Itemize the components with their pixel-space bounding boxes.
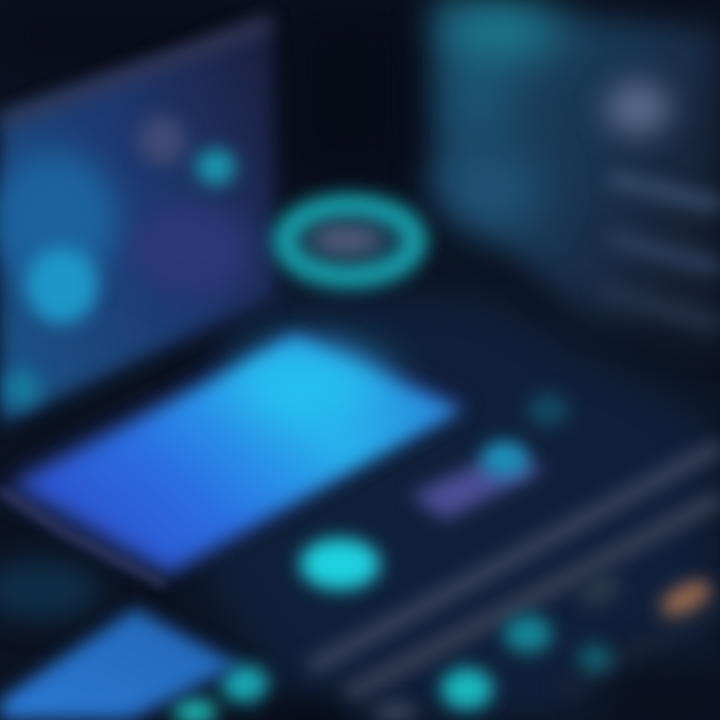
- panel: small purple card and teal dot: [410, 394, 568, 520]
- icon: grey blob and lines on right screen: [606, 82, 670, 134]
- icon: small teal dots: [173, 615, 612, 720]
- screen blobs: [0, 152, 250, 295]
- panel edge: [0, 22, 270, 122]
- panel: lower left blue screen: [0, 560, 240, 720]
- panel: main glowing blue screen: [0, 330, 468, 585]
- dark corner at bottom: [275, 700, 345, 720]
- icon: central teal ring: [284, 205, 416, 277]
- icon: teal oval button: [300, 538, 380, 590]
- panel: keyboard bars at lower right: [310, 446, 720, 696]
- panel: left tilted screen: [0, 18, 276, 425]
- icon: teal circle on left screen: [26, 248, 98, 324]
- screen rim: [0, 490, 165, 585]
- icon: orange indicator: [574, 568, 717, 623]
- panel: right tilted screen: [436, 0, 720, 350]
